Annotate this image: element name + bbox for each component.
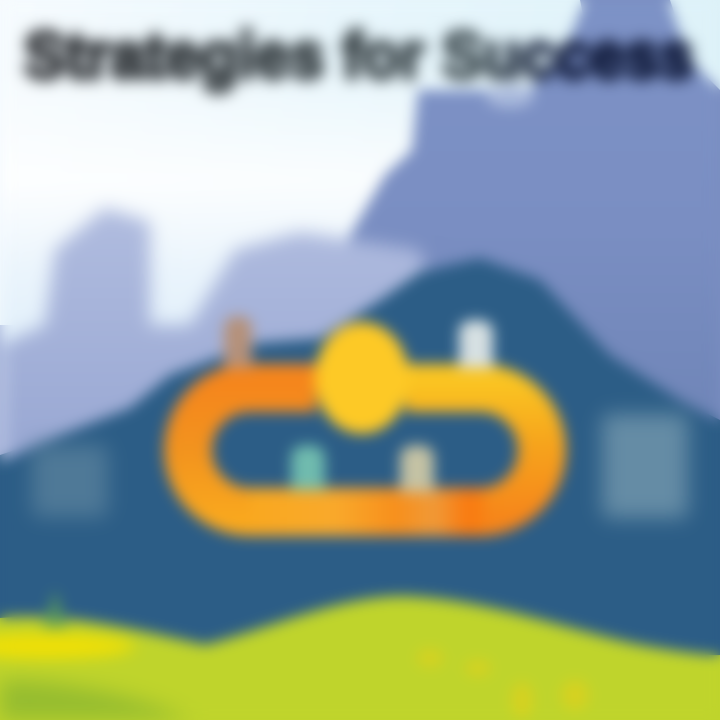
green hill <box>0 596 720 720</box>
dark green hill corner <box>0 680 190 720</box>
light spot under title <box>486 86 534 108</box>
far mountain right <box>300 0 720 450</box>
far mountain left <box>0 208 440 480</box>
ring right arc <box>406 388 542 512</box>
yellow band on hill <box>0 633 135 659</box>
icon: lower left figure <box>291 445 325 490</box>
icon: top right figure <box>459 320 493 368</box>
icon: lower right figure <box>400 445 434 492</box>
right text block <box>602 414 688 518</box>
left text block <box>32 445 108 517</box>
central sun circle <box>315 322 409 434</box>
near mountain <box>0 258 720 690</box>
icon: top left figure <box>224 316 252 368</box>
cycle diagram <box>188 316 542 536</box>
ring left arc <box>188 388 316 512</box>
ring bottom band <box>250 488 485 536</box>
small green bush <box>42 590 68 628</box>
title: Strategies for Success <box>24 18 694 92</box>
yellow flower patch <box>417 649 589 718</box>
